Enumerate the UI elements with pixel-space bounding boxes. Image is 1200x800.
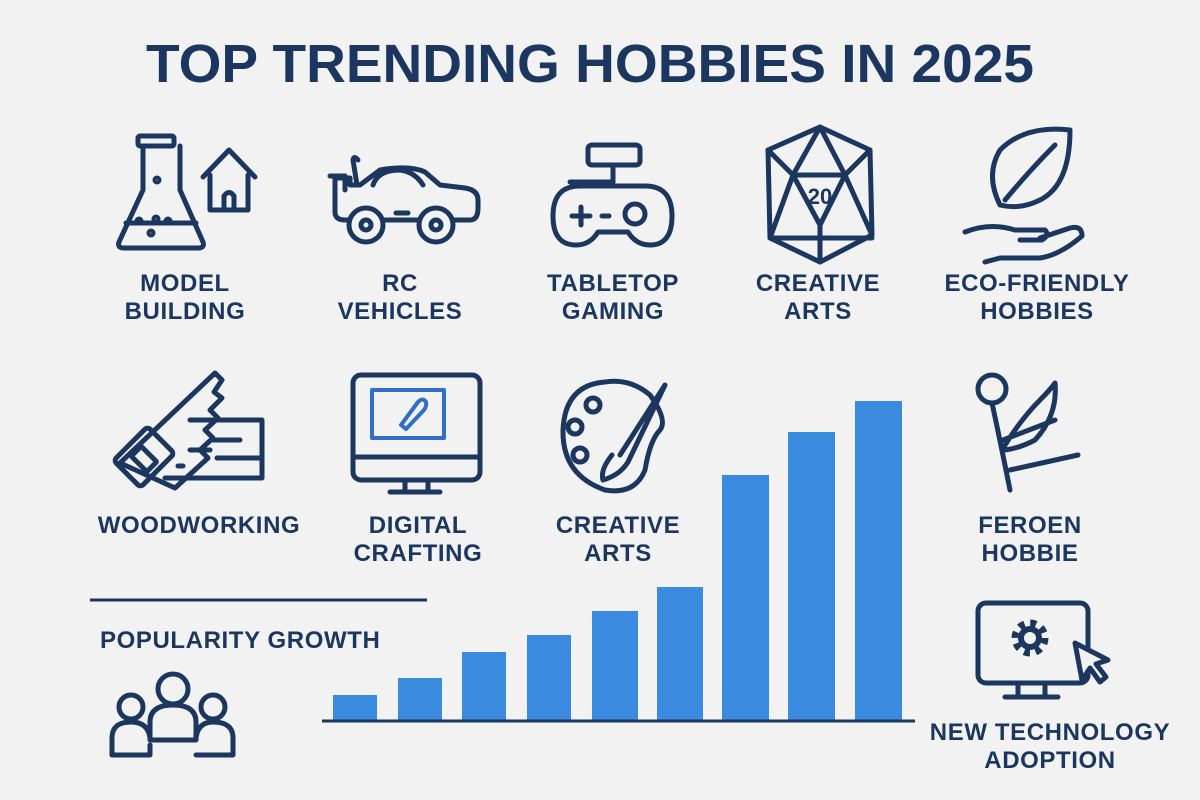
icon: model building: [119, 136, 255, 248]
icon: d20: [768, 127, 872, 262]
labels: HOBBIE: [982, 540, 1078, 567]
icon: monitor gear: [978, 603, 1108, 697]
labels: NEW TECHNOLOGY: [930, 719, 1170, 746]
labels: FEROEN: [978, 512, 1082, 539]
labels: RC: [382, 270, 418, 297]
heading: popularity growth: POPULARITY GROWTH: [100, 627, 380, 654]
icon: plant: [978, 375, 1078, 490]
labels: WOODWORKING: [98, 512, 300, 539]
d20 number: 20: [808, 184, 832, 209]
icon: monitor digital: [353, 375, 480, 492]
labels: ARTS: [784, 298, 852, 325]
icon: rc vehicle: [330, 158, 478, 242]
labels: VEHICLES: [338, 298, 462, 325]
labels: ARTS: [584, 540, 652, 567]
labels: BUILDING: [125, 298, 245, 325]
labels: TABLETOP: [547, 270, 679, 297]
labels: HOBBIES: [980, 298, 1094, 325]
labels: DIGITAL: [369, 512, 467, 539]
icon: people: [112, 674, 233, 755]
labels: ECO-FRIENDLY: [944, 270, 1130, 297]
icon: eco leaf hand: [965, 129, 1082, 262]
labels: ADOPTION: [984, 747, 1116, 774]
labels: CRAFTING: [354, 540, 482, 567]
labels: [98, 270, 1170, 774]
labels: CREATIVE: [556, 512, 680, 539]
labels: MODEL: [140, 270, 230, 297]
labels: CREATIVE: [756, 270, 880, 297]
divider line: [90, 598, 427, 602]
icon: game controller: [553, 145, 672, 245]
labels: GAMING: [562, 298, 664, 325]
icon: palette: [563, 381, 665, 491]
icon: saw and wood: [114, 373, 262, 488]
bar chart: [322, 401, 915, 721]
title: TOP TRENDING HOBBIES IN 2025: [146, 34, 1034, 94]
